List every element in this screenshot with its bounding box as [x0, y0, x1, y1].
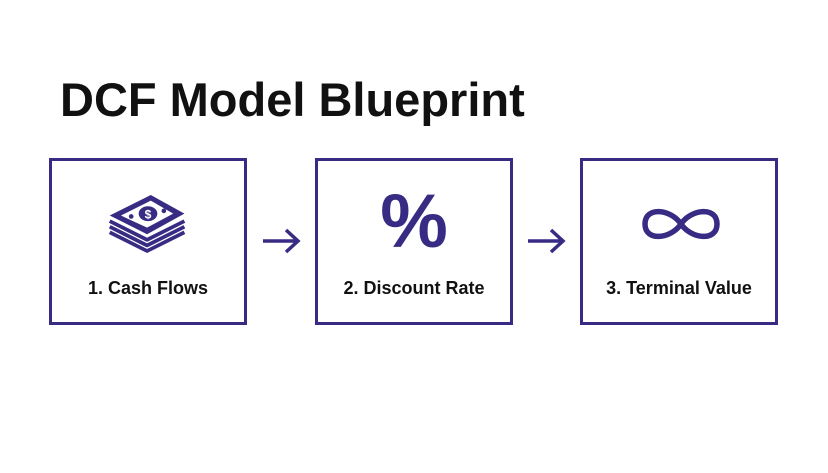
- label: 3. Terminal Value: [606, 278, 752, 298]
- panel: cash flows: [49, 158, 247, 325]
- icon: infinity: [642, 208, 720, 240]
- icon: percent: %: [380, 179, 448, 264]
- arrow 1: [263, 228, 300, 254]
- icon: money stack: $: [145, 207, 152, 221]
- icon: money stack: [108, 195, 186, 253]
- panel: discount rate: [315, 158, 513, 325]
- title: DCF Model Blueprint: [60, 73, 525, 126]
- arrow 2: [528, 228, 566, 254]
- label: 1. Cash Flows: [88, 278, 208, 298]
- label: 2. Discount Rate: [343, 278, 485, 298]
- panel: terminal value: [580, 158, 778, 325]
